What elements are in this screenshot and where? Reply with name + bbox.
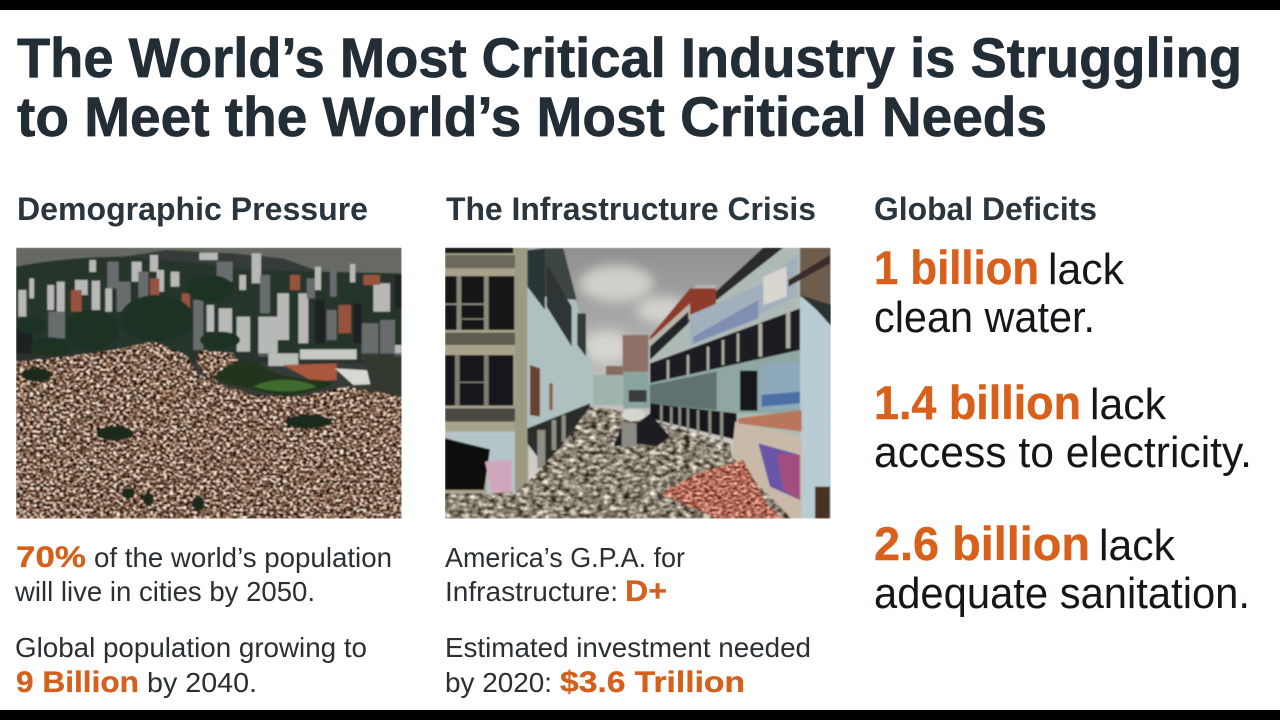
- title: to Meet the World’s Most Critical Needs: [17, 85, 1047, 148]
- photo: favela and city skyline: [16, 248, 402, 519]
- text: estimated investment: [445, 632, 811, 699]
- stat: electricity: 1.4 billion: [874, 376, 1081, 429]
- stat: clean water: [874, 241, 1125, 342]
- bottom letterbox bar: [0, 710, 1280, 720]
- central debris: [613, 413, 670, 447]
- text: population growth: by 2040.: [147, 667, 257, 698]
- heading: infrastructure crisis: The Infrastructure Crisis: [446, 191, 816, 227]
- text: population growth: Global population growing to: [15, 632, 367, 663]
- panel: global deficits: [874, 191, 1252, 618]
- dark shrubs: [22, 368, 332, 511]
- heading: global deficits: Global Deficits: [874, 191, 1097, 227]
- stat: sanitation: lack: [1099, 521, 1176, 570]
- text: GPA for infrastructure: [445, 542, 685, 608]
- stat: electricity: [874, 376, 1252, 477]
- panel: infrastructure crisis: [445, 191, 832, 699]
- text: 70% of population in cities: 70%: [16, 541, 86, 574]
- low buildings: [268, 353, 298, 366]
- text: 70% of population in cities: of the world’s population: [94, 542, 392, 573]
- clouds: [580, 265, 690, 363]
- left building side: [527, 248, 593, 428]
- stat: clean water: lack: [1048, 245, 1125, 294]
- stat: sanitation: adequate sanitation.: [874, 569, 1250, 618]
- left building front: [445, 248, 528, 493]
- favela hillside: [16, 342, 402, 519]
- heading: demographic pressure: Demographic Pressure: [17, 191, 368, 227]
- photo: ruined factory: [445, 248, 832, 519]
- text: GPA for infrastructure: D+: [625, 575, 667, 608]
- text: GPA for infrastructure: Infrastructure:: [445, 576, 618, 607]
- right corner wall: [799, 296, 830, 518]
- text: 70% of population in cities: [14, 541, 392, 607]
- rubble: [445, 407, 792, 519]
- lower right wall with graffiti: [732, 422, 802, 519]
- text: GPA for infrastructure: America’s G.P.A. for: [445, 542, 685, 573]
- panel: demographic pressure: [14, 191, 402, 699]
- stat: clean water: clean water.: [874, 293, 1095, 342]
- bricks: [660, 460, 783, 519]
- title: The World’s Most Critical Industry is Struggling: [17, 26, 1242, 89]
- right building: [648, 248, 832, 519]
- stat: electricity: access to electricity.: [874, 428, 1252, 477]
- top letterbox bar: [0, 0, 1280, 10]
- stat: clean water: 1 billion: [874, 241, 1039, 294]
- distant building: [623, 335, 649, 375]
- green patch: [213, 362, 333, 397]
- title: [17, 26, 1242, 148]
- stat: electricity: lack: [1090, 380, 1167, 429]
- text: 70% of population in cities: will live in cities by 2050.: [14, 576, 315, 607]
- text: estimated investment: Estimated investment needed: [445, 632, 811, 663]
- text: population growth: 9 Billion: [16, 666, 139, 699]
- text: estimated investment: $3.6 Trillion: [560, 666, 745, 699]
- trees: [17, 275, 240, 356]
- stat: sanitation: [874, 517, 1250, 618]
- stat: sanitation: 2.6 billion: [874, 517, 1090, 570]
- text: estimated investment: by 2020:: [445, 667, 552, 698]
- text: population growth: [15, 632, 367, 699]
- ground floor columns: [650, 403, 737, 440]
